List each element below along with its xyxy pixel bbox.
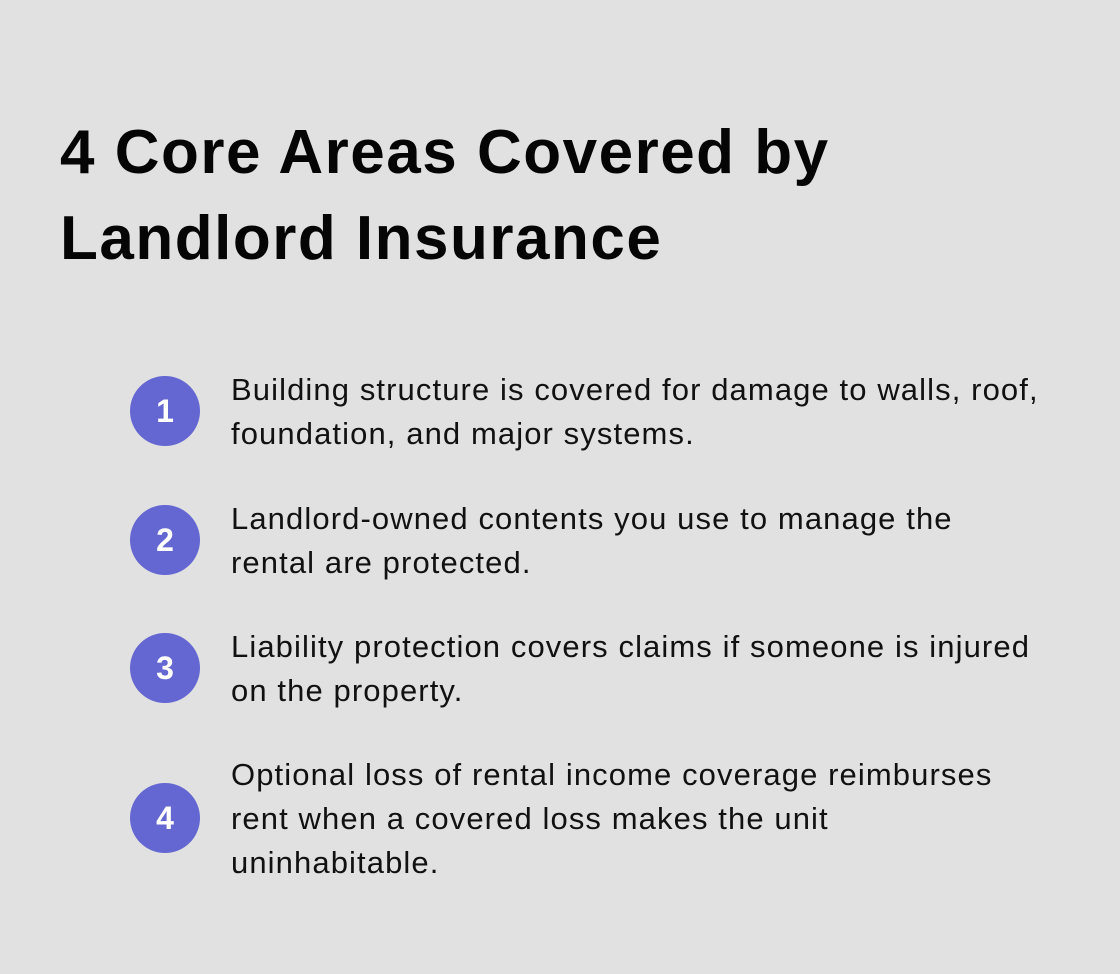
item 2 (130, 501, 953, 580)
item 4 (130, 757, 992, 880)
number circle 4 (130, 783, 200, 853)
title: 4 Core Areas Covered by (60, 118, 830, 187)
text 3: on the property. (231, 673, 463, 708)
item 3 (130, 629, 1030, 708)
number circle 3 (130, 633, 200, 703)
item 1 (130, 372, 1039, 451)
text 3 (231, 629, 1030, 708)
text 3: Liability protection covers claims if someone is injured (231, 629, 1030, 664)
text 4: rent when a covered loss makes the unit (231, 801, 829, 836)
number circle 4: 4 (156, 800, 174, 836)
text 1 (231, 372, 1039, 451)
text 4 (231, 757, 992, 880)
text 1: foundation, and major systems. (231, 416, 695, 451)
number circle 2: 2 (156, 522, 174, 558)
number circle 3: 3 (156, 650, 174, 686)
text 2 (231, 501, 953, 580)
text 1: Building structure is covered for damage to walls, roof, (231, 372, 1039, 407)
number circle 1: 1 (156, 393, 174, 429)
text 2: Landlord-owned contents you use to manage the (231, 501, 953, 536)
text 4: Optional loss of rental income coverage reimburses (231, 757, 992, 792)
number circle 1 (130, 376, 200, 446)
number circle 2 (130, 505, 200, 575)
text 2: rental are protected. (231, 545, 532, 580)
text 4: uninhabitable. (231, 845, 439, 880)
title (60, 118, 830, 273)
title: Landlord Insurance (60, 204, 662, 273)
